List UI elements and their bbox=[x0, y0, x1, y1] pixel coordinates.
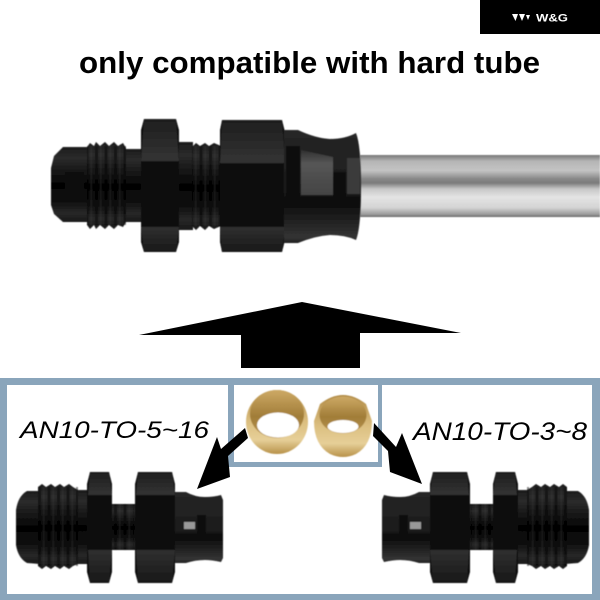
brass ring large bbox=[246, 390, 308, 454]
label: left size: AN10-TO-5~16 bbox=[18, 417, 210, 444]
second nut bbox=[220, 120, 285, 252]
arrow: to right fitting bbox=[373, 423, 422, 484]
large up arrow bbox=[139, 302, 461, 368]
thread front bbox=[87, 142, 126, 229]
right fitting bbox=[382, 472, 589, 583]
icon: brand triangles bbox=[512, 14, 530, 21]
main fitting bbox=[51, 119, 361, 252]
panel: brass ferrule box bbox=[228, 385, 382, 467]
first nut bbox=[141, 119, 179, 252]
brand name: W&G bbox=[536, 12, 568, 24]
hard tube bbox=[360, 155, 600, 217]
title: only compatible with hard tube bbox=[79, 46, 540, 80]
left fitting bbox=[16, 472, 223, 583]
label: right size: AN10-TO-3~8 bbox=[411, 418, 587, 446]
neck rear bbox=[179, 142, 193, 230]
thread rear bbox=[192, 143, 221, 230]
brass ring small bbox=[314, 395, 372, 457]
panel: olive kits frame bbox=[0, 378, 600, 600]
arrow: to left fitting bbox=[197, 428, 248, 489]
brand badge bbox=[480, 0, 600, 34]
nose bbox=[51, 147, 90, 222]
neck front bbox=[126, 149, 142, 222]
collar bbox=[284, 130, 361, 243]
